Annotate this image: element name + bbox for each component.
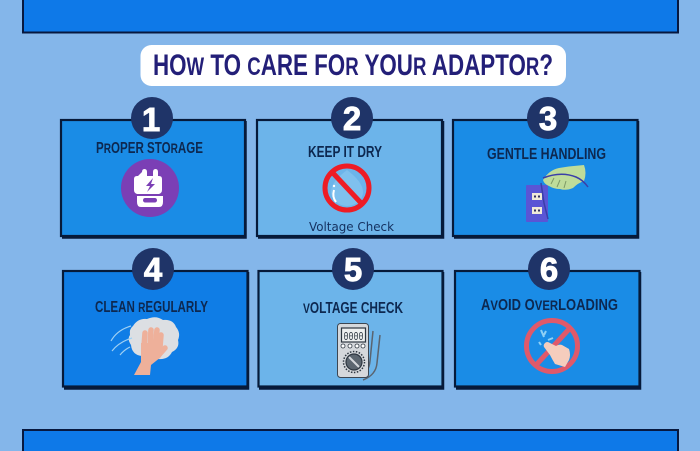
heading: clean regularly: CLEAN REGULARLY (95, 299, 208, 316)
icon: multimeter (338, 324, 380, 380)
heading: keep it dry: KEEP IT DRY (308, 144, 382, 161)
number badge 2: 2 (343, 100, 361, 137)
number badge 3 (527, 97, 569, 139)
title: HOW TO CARE FOR YOUR ADAPTOR? (153, 49, 553, 82)
title pill (140, 45, 566, 86)
heading: gentle handling: GENTLE HANDLING (487, 146, 606, 163)
panel: gentle handling (453, 97, 638, 237)
number badge 1 (131, 97, 173, 139)
number badge 5: 5 (344, 251, 362, 288)
caption: voltage check: Voltage Check (309, 220, 394, 234)
heading: voltage check: VOLTAGE CHECK (303, 300, 403, 317)
number badge 1: 1 (142, 101, 160, 138)
panel: clean regularly (63, 248, 248, 388)
number badge 6 (528, 248, 570, 290)
number badge 4: 4 (144, 251, 163, 288)
panel: keep it dry (257, 97, 442, 237)
heading: proper storage: PROPER STORAGE (96, 140, 203, 157)
number badge 3: 3 (539, 100, 557, 137)
bottom banner (23, 430, 678, 451)
panel: voltage check (258, 248, 442, 388)
icon: no overloading (526, 320, 578, 372)
number badge 6: 6 (540, 251, 558, 288)
icon: adaptor (121, 159, 179, 217)
number badge 2 (331, 97, 373, 139)
panel: avoid overloading (455, 248, 640, 388)
panel: proper storage (61, 97, 245, 237)
heading: avoid overloading: AVOID OVERLOADING (481, 297, 618, 314)
number badge 5 (332, 248, 374, 290)
icon: hand unplugging from socket (526, 165, 588, 222)
icon: no water (325, 166, 369, 210)
number badge 4 (132, 248, 174, 290)
icon: hand cleaning with cloth (111, 317, 179, 375)
icon: multimeter: 0000 (344, 330, 364, 344)
top banner (23, 0, 678, 32)
